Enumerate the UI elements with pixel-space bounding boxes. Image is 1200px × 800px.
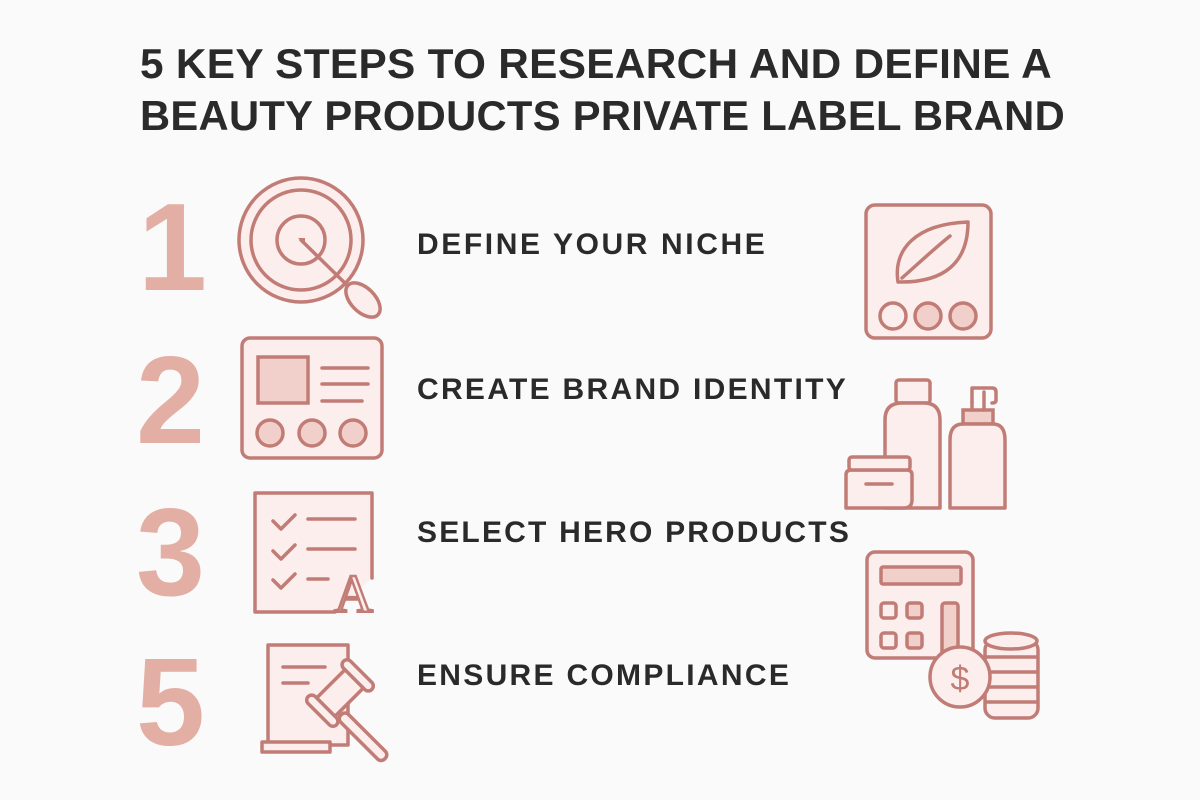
icon: calculator with coins — [867, 552, 1038, 718]
number 2: 2 — [136, 332, 205, 470]
title: 5 KEY STEPS TO RESEARCH AND DEFINE A — [140, 40, 1052, 87]
title — [140, 40, 1065, 139]
step label 5: ENSURE COMPLIANCE — [417, 659, 791, 692]
icon: checklist: A — [334, 564, 373, 624]
icon: target — [239, 178, 386, 323]
step label 3: SELECT HERO PRODUCTS — [417, 516, 851, 549]
step label 1: DEFINE YOUR NICHE — [417, 228, 767, 261]
step label 2: CREATE BRAND IDENTITY — [417, 373, 848, 406]
number 3: 3 — [136, 484, 205, 622]
icon: cosmetic bottles — [846, 380, 1005, 508]
icon: calculator with coins: $ — [951, 660, 970, 698]
icon: leaf palette — [866, 205, 991, 338]
icon: brand card — [242, 338, 382, 458]
title: BEAUTY PRODUCTS PRIVATE LABEL BRAND — [140, 92, 1065, 139]
icon: checklist — [255, 493, 373, 624]
number 5: 5 — [136, 634, 205, 772]
icon: document with gavel — [262, 645, 389, 763]
number 1: 1 — [138, 179, 207, 317]
